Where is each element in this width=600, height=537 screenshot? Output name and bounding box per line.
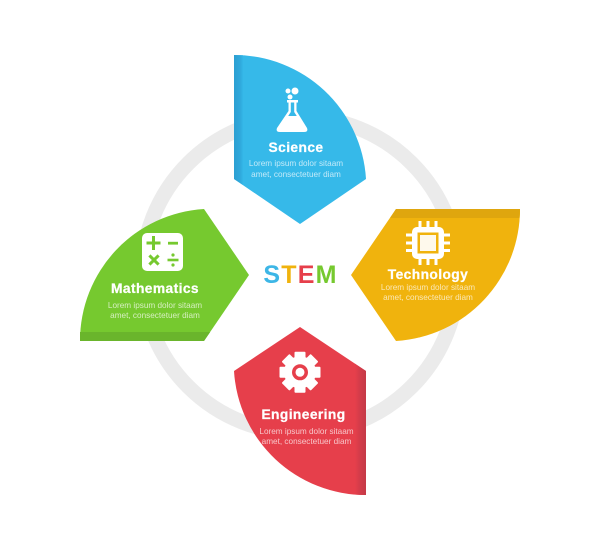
text: science: amet, consectetuer diam [251, 170, 341, 179]
ring [142, 117, 458, 433]
text: technology: Lorem ipsum dolor sitaam [381, 283, 475, 292]
panel: engineering [234, 327, 366, 495]
text: engineering: Lorem ipsum dolor sitaam [259, 427, 354, 436]
heading: mathematics: Mathematics [111, 281, 199, 296]
icon: flask [277, 88, 307, 132]
text: mathematics: amet, consectetuer diam [110, 311, 200, 320]
panel: mathematics [80, 209, 249, 341]
icon: gear [280, 352, 320, 393]
icon: chip [406, 221, 450, 265]
text: science: Lorem ipsum dolor sitaam [249, 159, 343, 168]
panel: science [234, 55, 366, 224]
heading: science: Science [269, 140, 323, 155]
text: mathematics: Lorem ipsum dolor sitaam [108, 301, 202, 310]
text: technology: amet, consectetuer diam [383, 293, 473, 302]
heading: technology: Technology [388, 267, 468, 282]
text: engineering: amet, consectetuer diam [262, 437, 352, 446]
panel: technology [351, 209, 520, 341]
title: STEM: STEM [263, 261, 338, 289]
icon: calculator [142, 233, 183, 271]
heading: engineering: Engineering [261, 407, 346, 422]
